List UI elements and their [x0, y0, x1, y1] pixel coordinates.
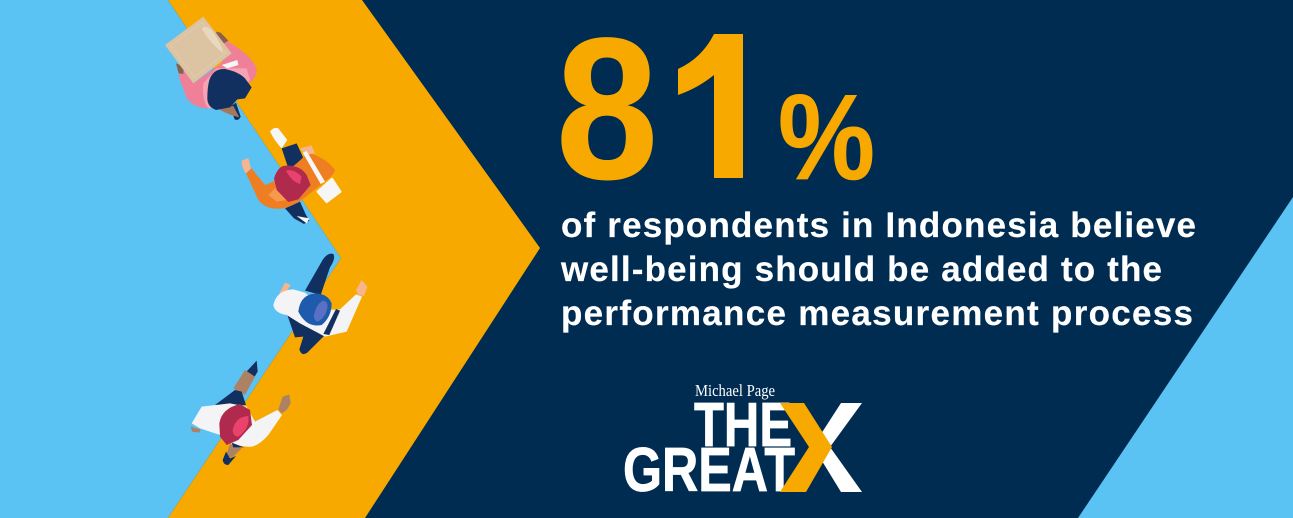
- icon: person in orange with bag: [242, 128, 340, 224]
- logo: white X strokes: [821, 403, 862, 447]
- icon: person in white with red hair: [191, 361, 291, 465]
- text block: description: of respondents in Indonesia believe: [561, 206, 1196, 245]
- icon: person in white with blue backpack: [273, 254, 367, 354]
- text block: description: [560, 206, 1196, 333]
- panel: light blue bottom-right triangle: [1078, 197, 1293, 518]
- panel: yellow chevron: [168, 0, 540, 518]
- logo: THE: THE: [694, 391, 792, 460]
- big number: 81: 1: [669, 0, 781, 221]
- text block: description: performance measurement process: [561, 294, 1193, 333]
- icon: person carrying box: [165, 17, 257, 120]
- text block: description: well-being should be added to the: [560, 250, 1162, 289]
- logo: Michael Page wordmark: Michael Page: [695, 381, 775, 400]
- logo: yellow X chevron: [780, 403, 832, 492]
- logo: Michael Page The Great X: [623, 381, 862, 505]
- big number: 81: 8: [556, 0, 658, 221]
- panel: light blue left background: [0, 0, 341, 518]
- logo: GREAT: GREAT: [623, 436, 795, 505]
- big number: 81: [556, 0, 781, 221]
- big percent sign: %: [778, 69, 875, 205]
